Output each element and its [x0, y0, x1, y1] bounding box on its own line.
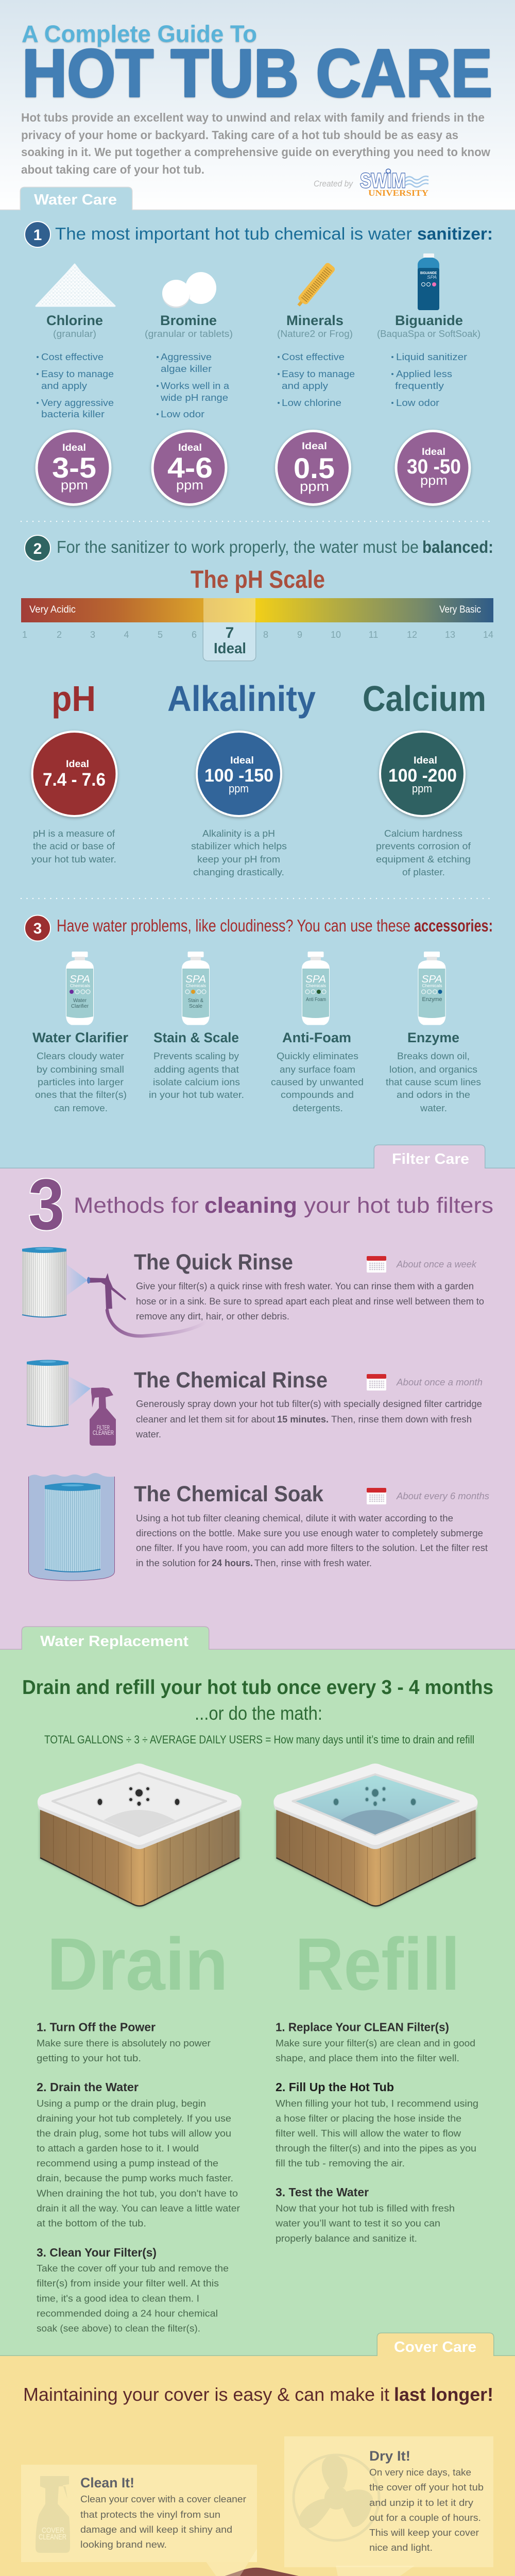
icon: filter cartridge with spray bottle: [27, 1360, 116, 1446]
ideal badge: bromine 4-6 ppm: ppm: [176, 477, 203, 493]
icon: water clarifier bottle: [66, 952, 94, 1025]
ph scale bar: 11: [369, 630, 378, 640]
step 2 badge: [25, 535, 50, 561]
method: the chemical rinse: Generously spray down your hot tub filter(s) with specially designed filter cartridge: [136, 1399, 482, 1409]
sanitizer: bromine: Low odor: [161, 409, 204, 419]
sanitizer: chlorine: Chlorine: [46, 313, 103, 328]
ideal badge: chlorine 3-5 ppm: Ideal: [62, 443, 86, 453]
callout: dry it: Dry It!: [369, 2448, 410, 2464]
callout: clean it: [21, 2465, 257, 2562]
sanitizer: minerals: and apply: [282, 381, 328, 391]
method: the quick rinse: [134, 1250, 484, 1321]
method: the chemical soak: About every 6 months: [396, 1491, 489, 1501]
method: the chemical rinse: About once a month: [396, 1377, 483, 1387]
intro text: privacy of your home or backyard. Taking care of a hot tub should be as easy as: [21, 128, 458, 142]
icon: enzyme bottle: Enzyme: [422, 996, 442, 1003]
balance column: alkalinity: [167, 679, 316, 877]
accessory: anti-foam: Anti-Foam: [282, 1030, 351, 1045]
accessory: anti-foam: [271, 1030, 364, 1113]
accessory: water clarifier: Clears cloudy water: [37, 1051, 124, 1061]
balance column: calcium: Ideal: [414, 755, 437, 766]
logo: swim university small: SWIM: [360, 170, 406, 192]
icon: filter soaking in solution: [29, 1473, 114, 1581]
intro text: [21, 111, 491, 176]
panel: cover care: [0, 2333, 515, 2576]
ideal badge: chlorine 3-5 ppm: 3-5: [52, 451, 96, 484]
icon: biguanide bottle: [418, 253, 439, 310]
method: the chemical rinse: Then, rinse them down with fresh: [331, 1414, 472, 1425]
ph scale bar: 6: [192, 630, 197, 640]
method: the chemical soak: Then, rinse with fresh water.: [254, 1558, 372, 1568]
drain steps: at the bottom of the tub.: [37, 2218, 146, 2229]
accessory: stain and scale: Stain & Scale: [153, 1030, 239, 1045]
step 1 heading: sanitizer:: [417, 224, 493, 243]
balance column: calcium: prevents corrosion of: [376, 841, 471, 851]
method: the chemical soak: Using a hot tub filter cleaning chemical, dilute it with water according to the: [136, 1513, 453, 1523]
method: the chemical rinse: 15 minutes.: [277, 1414, 329, 1425]
drain steps: getting to your hot tub.: [37, 2053, 141, 2063]
ideal badge: minerals 0.5 ppm: [276, 431, 350, 505]
sanitizer: bromine: wide pH range: [160, 393, 228, 403]
ph scale bar: 12: [407, 630, 417, 640]
step 3 heading: Have water problems, like cloudiness? You can use these: [57, 916, 410, 935]
icon: enzyme bottle: SPA: [421, 974, 442, 985]
balance column: alkalinity: stabilizer which helps: [191, 841, 287, 851]
drain steps: recommend using a pump instead of the: [37, 2158, 218, 2168]
method: the chemical soak: directions on the bottle. Make sure you use enough water to completely submerge: [136, 1528, 483, 1538]
sanitizer: minerals: [277, 313, 355, 408]
step 2 heading: balanced:: [422, 537, 493, 556]
sanitizer: chlorine: bacteria killer: [41, 409, 105, 419]
sanitizer: minerals: Minerals: [286, 313, 344, 328]
logo: swim university small: [360, 169, 428, 198]
ph scale bar: 7: [226, 624, 234, 641]
sanitizer: bromine: (granular or tablets): [145, 329, 233, 339]
ph scale bar: 2: [57, 630, 62, 640]
step 1 badge: 1: [33, 227, 42, 244]
sanitizer: chlorine: Cost effective: [41, 352, 104, 362]
accessory: enzyme: lotion, and organics: [389, 1064, 477, 1075]
accessory: enzyme: Breaks down oil,: [397, 1051, 470, 1061]
drain steps: Take the cover off your tub and remove the: [37, 2263, 229, 2274]
title: a complete guide to: A Complete Guide To: [22, 21, 257, 47]
callout: clean it: damage and will keep it shiny and: [80, 2524, 232, 2535]
accessory: water clarifier: ones that the filter(s): [35, 1090, 127, 1100]
callout: dry it: [284, 2436, 493, 2567]
heading: the ph scale: The pH Scale: [191, 566, 325, 594]
big number 3: 3: [28, 1164, 64, 1245]
callout: dry it: out for a couple of hours.: [369, 2513, 481, 2523]
balance column: alkalinity: keep your pH from: [197, 854, 280, 865]
refill steps: fill the tub - removing the air.: [276, 2158, 405, 2168]
drain steps: filter(s) from inside your filter well. At this: [37, 2278, 219, 2289]
drain steps: 1. Turn Off the Power: [37, 2021, 156, 2034]
accessory: enzyme: Enzyme: [407, 1030, 459, 1045]
icon: water clarifier bottle: Water: [73, 998, 87, 1004]
ph scale bar: 13: [445, 630, 455, 640]
method: the quick rinse: The Quick Rinse: [134, 1250, 293, 1275]
icon: enzyme bottle: Chemicals: [422, 984, 442, 988]
accessory: water clarifier: particles into larger: [38, 1077, 124, 1087]
icon: anti-foam bottle: Anti Foam: [306, 997, 326, 1003]
refill steps: When filling your hot tub, I recommend using: [276, 2098, 478, 2109]
accessory: enzyme: that cause scum lines: [386, 1077, 481, 1087]
ph scale bar: 10: [331, 630, 341, 640]
ph scale bar: Very Basic: [439, 604, 481, 615]
step 2 badge: 2: [33, 540, 42, 557]
icon: fan: [294, 2455, 379, 2540]
illustration: hot tub cover: [56, 2568, 458, 2576]
icon: water clarifier bottle: Chemicals: [70, 984, 90, 988]
method: the chemical soak: [134, 1482, 489, 1568]
sanitizer: bromine: Works well in a: [161, 381, 230, 391]
drain steps: to attach a garden hose to it. I would: [37, 2143, 199, 2154]
cover heading: last longer!: [394, 2384, 493, 2405]
sanitizer: biguanide: frequently: [395, 381, 444, 391]
accessory: stain and scale: isolate calcium ions: [153, 1077, 240, 1087]
accessory: water clarifier: can remove.: [54, 1103, 108, 1113]
refill steps: a hose filter or placing the hose inside the: [276, 2113, 461, 2124]
method: the quick rinse: hose or in a sink. Be sure to spread apart each pleat and rinse well between them to: [136, 1296, 484, 1307]
method: the chemical rinse: cleaner and let them sit for about: [136, 1414, 275, 1425]
method: the quick rinse: About once a week: [396, 1259, 477, 1269]
accessory: stain and scale: [149, 1030, 244, 1100]
logo: swim university small: UNIVERSITY: [368, 188, 428, 198]
icon: anti-foam bottle: SPA: [305, 974, 326, 985]
balance column: calcium: of plaster.: [402, 867, 445, 877]
ph scale bar: Very Acidic: [29, 604, 76, 615]
drain steps: Using a pump or the drain plug, begin: [37, 2098, 206, 2109]
callout: clean it: Clean your cover with a cover cleaner: [80, 2494, 246, 2504]
balance column: ph: the acid or base of: [33, 841, 115, 851]
accessory: water clarifier: by combining small: [37, 1064, 124, 1075]
sanitizer: chlorine: Easy to manage: [41, 369, 114, 379]
panel: filter care: [0, 1145, 515, 1651]
icon: anti-foam bottle: Chemicals: [306, 984, 326, 988]
ideal badge: bromine 4-6 ppm: Ideal: [178, 443, 202, 453]
balance column: alkalinity: Alkalinity: [167, 679, 316, 719]
sanitizer: biguanide: Liquid sanitizer: [396, 352, 467, 362]
drain steps: Make sure there is absolutely no power: [37, 2038, 211, 2048]
balance column: calcium: Calcium hardness: [384, 828, 462, 839]
balance column: calcium: Calcium: [363, 679, 486, 719]
ideal badge: bromine 4-6 ppm: [152, 431, 226, 505]
icon: water clarifier bottle: Clarifier: [71, 1004, 89, 1009]
ph scale bar: 3: [90, 630, 95, 640]
ideal badge: minerals 0.5 ppm: Ideal: [302, 441, 327, 452]
balance column: alkalinity: Alkalinity is a pH: [202, 828, 275, 839]
icon: cover cleaner bottle: COVER: [42, 2526, 64, 2535]
refill steps: shape, and place them into the filter well.: [276, 2053, 459, 2063]
balance column: ph: pH: [52, 679, 96, 719]
subheading: do the math: ...or do the math:: [195, 1703, 322, 1724]
drain steps: [37, 2021, 240, 2334]
method: the chemical soak: in the solution for: [136, 1558, 210, 1568]
balance column: calcium: 100 -200: [388, 766, 457, 786]
balance column: ph: 7.4 - 7.6: [43, 770, 106, 790]
method: the chemical soak: one filter. If you have room, you can add more filters to the solution. Let the filter rest: [136, 1543, 488, 1553]
icon: filter cartridge with hose spray: [22, 1247, 207, 1336]
callout pointers: [78, 2549, 435, 2576]
icon: filter cartridge with spray bottle: FILTER: [97, 1425, 110, 1431]
accessory: anti-foam: Quickly eliminates: [277, 1051, 358, 1061]
sanitizer: bromine: [145, 313, 233, 419]
icon: stain and scale bottle: Chemicals: [186, 984, 206, 988]
callout: dry it: On very nice days, take: [369, 2467, 471, 2478]
drain steps: 3. Clean Your Filter(s): [37, 2246, 157, 2259]
filter heading: [74, 1193, 493, 1218]
step 3 badge: [25, 915, 50, 941]
sanitizer: biguanide: Applied less: [396, 369, 452, 379]
balance column: ph: pH is a measure of: [33, 828, 115, 839]
balance column: ph: your hot tub water.: [31, 854, 116, 865]
method: the chemical rinse: The Chemical Rinse: [134, 1368, 328, 1393]
tab: filter care: Filter Care: [392, 1151, 469, 1167]
step 3 heading: accessories:: [414, 916, 493, 935]
drain steps: drain, because the pump works much faster.: [37, 2173, 233, 2183]
refill steps: properly balance and sanitize it.: [276, 2233, 417, 2244]
step 1 heading: The most important hot tub chemical is water: [55, 224, 412, 243]
ideal badge: minerals 0.5 ppm: ppm: [300, 479, 329, 494]
accessory: stain and scale: Prevents scaling by: [153, 1051, 239, 1061]
balance column: calcium: [363, 679, 486, 877]
balance column: alkalinity: Ideal: [230, 755, 254, 766]
step 1 badge: [25, 222, 50, 247]
accessory: enzyme: and odors in the: [397, 1090, 470, 1100]
method: the quick rinse: remove any dirt, hair, or other debris.: [136, 1311, 289, 1321]
icon: stain and scale bottle: Scale: [189, 1004, 202, 1009]
drain steps: time, it's a good idea to clean them. I: [37, 2294, 199, 2304]
balance column: calcium: equipment & etching: [376, 854, 471, 865]
ideal badge: bromine 4-6 ppm: 4-6: [167, 451, 213, 484]
balance column: alkalinity: changing drastically.: [193, 867, 284, 877]
callout: clean it: looking brand new.: [80, 2539, 167, 2550]
callout: clean it: that protects the vinyl from sun: [80, 2510, 220, 2520]
accessory: water clarifier: [32, 1030, 128, 1113]
drain steps: recommended doing a 24 hour chemical: [37, 2309, 218, 2319]
filter heading: Methods for: [74, 1193, 199, 1218]
method: the chemical rinse: water.: [135, 1429, 161, 1439]
panel: water replacement: [0, 1627, 515, 2357]
icon: water clarifier bottle: SPA: [70, 974, 90, 985]
balance column: ph: [31, 679, 116, 865]
sanitizer: chlorine: Very aggressive: [41, 398, 114, 408]
panel: water care: [0, 188, 515, 1170]
refill steps: Now that your hot tub is filled with fresh: [276, 2204, 455, 2214]
ph scale bar: Ideal: [214, 640, 246, 657]
drain steps: soak (see above) to clean the filter(s).: [37, 2324, 200, 2334]
drain steps: When draining the hot tub, you don't have to: [37, 2189, 238, 2199]
method: the chemical soak: 24 hours.: [212, 1558, 253, 1568]
ph scale bar: 8: [263, 630, 268, 640]
step 2 heading: For the sanitizer to work properly, the water must be: [57, 537, 419, 556]
replacement heading: Drain and refill your hot tub once every 3 - 4 months: [22, 1676, 493, 1699]
accessory: enzyme: [386, 1030, 481, 1113]
refill steps: filter well. This will allow the water to flow: [276, 2128, 461, 2139]
icon: biguanide bottle: BIGUANIDE: [420, 272, 437, 275]
accessory: anti-foam: detergents.: [293, 1103, 343, 1113]
sanitizer: bromine: Aggressive: [161, 352, 212, 362]
ideal badge: chlorine 3-5 ppm: ppm: [61, 477, 88, 493]
accessory: enzyme: water.: [420, 1103, 447, 1113]
refill steps: water you’ll want to test it so you can: [275, 2218, 440, 2229]
ph scale bar: 4: [124, 630, 129, 640]
icon: cover cleaner bottle: CLEANER: [39, 2533, 66, 2541]
filter heading: cleaning: [204, 1193, 297, 1218]
drain steps: drain it all the way. You can leave a little water: [37, 2204, 240, 2214]
balance column: alkalinity: 100 -150: [204, 766, 273, 786]
ideal badge: biguanide 30-50 ppm: Ideal: [422, 447, 445, 457]
intro text: Hot tubs provide an excellent way to unwind and relax with family and friends in the: [21, 111, 485, 124]
icon: stain and scale bottle: [182, 952, 210, 1025]
sanitizer: bromine: Bromine: [160, 313, 217, 328]
icon: empty hot tub: [38, 1764, 242, 1906]
drain steps: 2. Drain the Water: [37, 2080, 139, 2094]
accessory: water clarifier: Water Clarifier: [32, 1030, 128, 1045]
refill steps: [275, 2021, 478, 2244]
sanitizer: biguanide: Low odor: [396, 398, 439, 408]
ideal badge: chlorine 3-5 ppm: [37, 431, 110, 505]
sanitizer: chlorine: (granular): [53, 329, 96, 339]
ph scale bar: 1: [22, 630, 27, 640]
accessory: anti-foam: any surface foam: [280, 1064, 355, 1075]
watermark word: drain: Drain: [47, 1923, 228, 2006]
cover heading: Maintaining your cover is easy & can make it: [23, 2384, 389, 2405]
icon: bromine tablets: [162, 272, 216, 308]
ideal badge: minerals 0.5 ppm: 0.5: [294, 452, 335, 484]
ideal badge: biguanide 30-50 ppm: [396, 431, 470, 505]
icon: stain and scale bottle: SPA: [185, 974, 206, 985]
intro text: soaking in it. We put together a comprehensive guide on everything you need to know: [21, 145, 491, 159]
sanitizer: minerals: Cost effective: [282, 352, 345, 362]
accessory: stain and scale: adding agents that: [154, 1064, 239, 1075]
callout: dry it: and unzip it to let it dry: [369, 2498, 473, 2508]
sanitizer: minerals: Easy to manage: [282, 369, 355, 379]
icon: stain and scale bottle: Stain &: [188, 998, 203, 1004]
icon: filled hot tub: [273, 1764, 477, 1906]
icon: chlorine granule pile: [36, 264, 115, 306]
filter heading: your hot tub filters: [304, 1193, 493, 1218]
accessory: stain and scale: in your hot tub water.: [149, 1090, 244, 1100]
sanitizer: biguanide: Biguanide: [395, 313, 463, 328]
accessory: anti-foam: compounds and: [281, 1090, 354, 1100]
ph scale bar: 9: [297, 630, 302, 640]
ph scale bar: 14: [483, 630, 493, 640]
watermark word: refill: Refill: [295, 1923, 460, 2006]
panel: header: [0, 0, 515, 211]
refill steps: 2. Fill Up the Hot Tub: [276, 2080, 394, 2094]
balance column: alkalinity: ppm: [229, 782, 249, 795]
refill steps: Make sure your filter(s) are clean and in good: [276, 2038, 475, 2048]
callout: clean it: Clean It!: [80, 2475, 134, 2490]
method: the quick rinse: Give your filter(s) a quick rinse with fresh water. You can rinse them with a garden: [136, 1281, 474, 1291]
balance column: calcium: ppm: [412, 782, 432, 795]
tab: water care: Water Care: [34, 192, 117, 208]
sanitizer: biguanide: (BaquaSpa or SoftSoak): [377, 329, 480, 339]
icon: anti-foam bottle: [302, 952, 330, 1025]
sanitizer: bromine: algae killer: [161, 364, 212, 374]
icon: enzyme bottle: [418, 952, 446, 1025]
drain steps: the drain plug, some hot tubs will allow you: [37, 2128, 231, 2139]
sanitizer: minerals: Low chlorine: [282, 398, 341, 408]
callout: dry it: This will keep your cover: [369, 2528, 479, 2538]
sanitizer: chlorine: and apply: [41, 381, 87, 391]
created by label: Created by: [314, 179, 353, 189]
ph scale bar: [21, 598, 493, 660]
balance column: ph: Ideal: [66, 759, 89, 770]
icon: cover cleaner bottle: [36, 2476, 70, 2553]
accessory: anti-foam: caused by unwanted: [271, 1077, 364, 1087]
icon: mineral stick: [294, 262, 336, 309]
intro text: about taking care of your hot tub.: [21, 163, 204, 176]
icon: filter cartridge with spray bottle: CLEANER: [93, 1430, 114, 1436]
callout: dry it: the cover off your hot tub: [369, 2482, 484, 2493]
tab: cover care: Cover Care: [394, 2339, 476, 2355]
icon: biguanide bottle: SPA: [427, 275, 437, 280]
drain steps: draining your hot tub completely. If you use: [37, 2113, 231, 2124]
sanitizer: minerals: (Nature2 or Frog): [277, 329, 353, 339]
step 3 badge: 3: [33, 920, 42, 937]
sanitizer: chlorine: [37, 313, 114, 419]
ph scale bar: 5: [158, 630, 163, 640]
ideal badge: biguanide 30-50 ppm: ppm: [420, 472, 448, 488]
method: the chemical soak: The Chemical Soak: [134, 1482, 323, 1506]
refill steps: 3. Test the Water: [276, 2185, 369, 2199]
sanitizer: biguanide: [377, 313, 480, 408]
refill steps: 1. Replace Your CLEAN Filter(s): [276, 2021, 449, 2034]
refill steps: through the filter(s) and into the pipes as you: [276, 2143, 476, 2154]
callout: dry it: nice and light.: [369, 2543, 433, 2553]
ideal badge: biguanide 30-50 ppm: 30 -50: [407, 455, 461, 478]
tab: water replacement: Water Replacement: [40, 1633, 188, 1650]
method: the chemical rinse: [134, 1368, 483, 1439]
